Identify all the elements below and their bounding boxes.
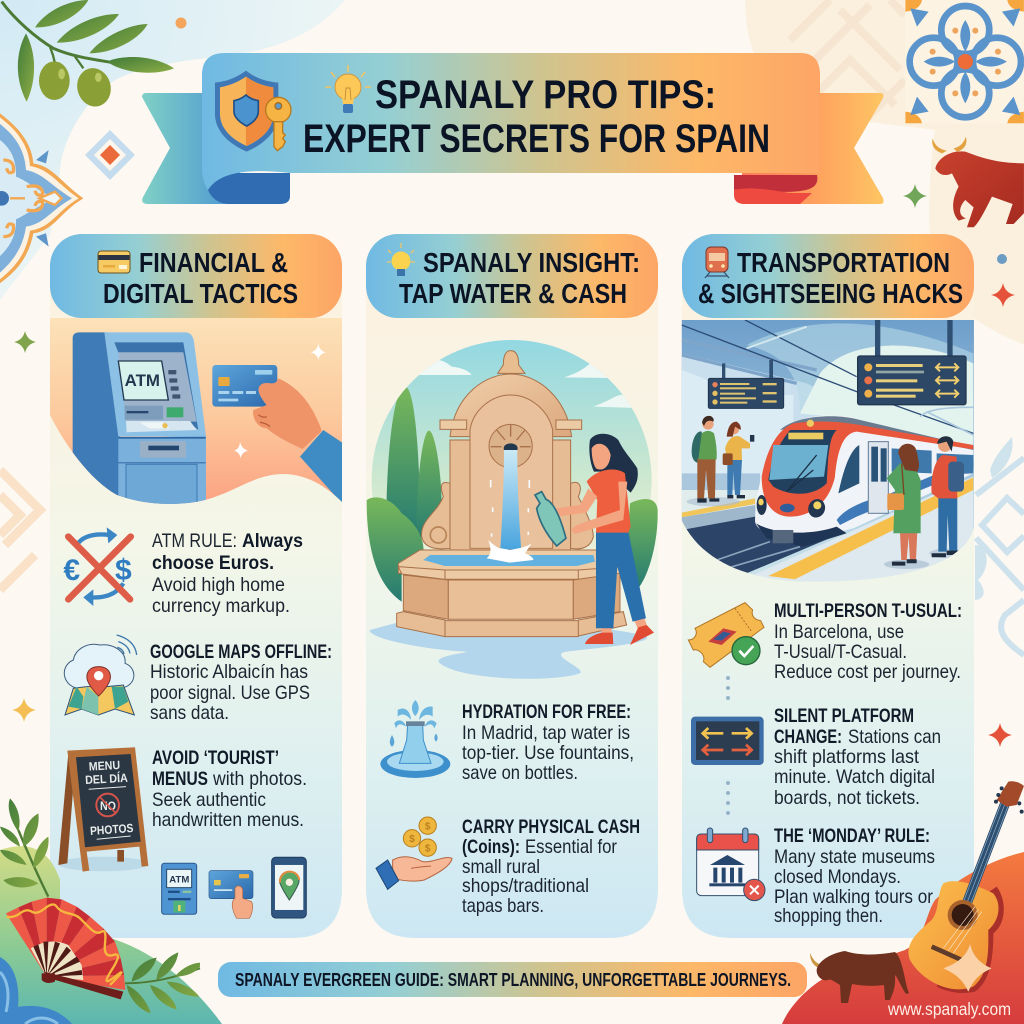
text: avoid tourist menus: with photos. xyxy=(212,768,307,790)
illustration: ATM and card xyxy=(50,318,342,504)
panel 3 background xyxy=(682,270,974,938)
decoration: spanish tile xyxy=(905,0,1024,123)
ribbon left tail xyxy=(142,93,240,204)
footer banner xyxy=(218,962,807,997)
header: transportation and sightseeing xyxy=(682,234,974,318)
people left xyxy=(687,497,740,506)
decoration: guitar xyxy=(908,781,1024,993)
text: the monday rule: closed Mondays. xyxy=(774,866,901,888)
icon: hand with coins: $ xyxy=(425,843,431,854)
text: silent platform change: SILENT PLATFORM xyxy=(774,706,914,727)
text: silent platform change: Stations can xyxy=(848,726,941,748)
icon: water fountain xyxy=(380,700,450,778)
icon: hand with coins: $ xyxy=(425,821,431,832)
title ribbon xyxy=(142,53,884,204)
ribbon main xyxy=(202,53,820,190)
text: carry physical cash: (Coins): xyxy=(462,837,520,858)
text: hydration for free: HYDRATION FOR FREE: xyxy=(462,702,631,723)
icon: mini phone xyxy=(272,857,306,918)
icon: metro ticket with check xyxy=(688,603,764,667)
background: blue top-left blob xyxy=(0,0,345,300)
decoration: fan xyxy=(6,898,125,999)
decoration: bottom left green blob xyxy=(0,846,222,1024)
title text: EXPERT SECRETS FOR SPAIN xyxy=(303,117,770,161)
text: ATM rule: Avoid high home xyxy=(152,574,285,596)
boards xyxy=(722,320,953,378)
basin xyxy=(370,622,647,679)
text: silent platform change: boards, not tickets. xyxy=(774,787,920,809)
text: ATM rule: Always xyxy=(242,531,303,552)
decoration: small bull xyxy=(810,951,909,1003)
text: hydration for free: In Madrid, tap water is xyxy=(462,722,630,744)
panel: transportation and sightseeing xyxy=(680,270,980,938)
icon: train xyxy=(705,247,729,278)
platform right xyxy=(750,477,973,583)
track xyxy=(682,517,833,573)
panel: spanaly insight xyxy=(360,270,660,938)
decoration: pale blue ornament right xyxy=(976,458,1024,655)
fountain back xyxy=(498,351,525,373)
sparkles and dots xyxy=(12,184,1015,747)
decoration: small diamond xyxy=(85,130,135,180)
icon: mini ATM: ATM xyxy=(169,874,189,884)
text: silent platform change: minute. Watch digital xyxy=(774,766,935,788)
train xyxy=(755,415,973,538)
icon: menu board: NO xyxy=(100,799,116,813)
decoration: bottom right red blob xyxy=(782,852,1024,1024)
panel 2 background xyxy=(366,270,658,938)
woman xyxy=(589,434,638,493)
header: spanaly insight: SPANALY INSIGHT: xyxy=(423,247,640,278)
text: avoid tourist menus: AVOID ‘TOURIST’ xyxy=(152,748,279,769)
text: carry physical cash: small rural xyxy=(462,856,540,878)
icon: menu board: PHOTOS xyxy=(90,821,134,838)
decoration: olive branch xyxy=(2,0,174,110)
text: avoid tourist menus: handwritten menus. xyxy=(152,809,304,831)
decoration: pale orange ornament left xyxy=(0,470,40,590)
header: transportation and sightseeing: & SIGHTSEEING HACKS xyxy=(698,278,963,309)
header: financial and digital tactics: DIGITAL TACTICS xyxy=(103,278,298,309)
decoration: bull top right xyxy=(932,137,1024,227)
website url: www.spanaly.com xyxy=(887,999,1011,1019)
icon: currency exchange crossed: $ xyxy=(115,554,132,587)
icon: platform board xyxy=(691,717,764,765)
text: carry physical cash: shops/traditional xyxy=(462,875,589,897)
platform left xyxy=(682,473,760,490)
icon: hand with coins: $ xyxy=(409,834,415,845)
text: the monday rule: Many state museums xyxy=(774,846,935,868)
icon: currency exchange crossed: € xyxy=(63,554,80,587)
text: google maps offline: Historic Albaicín has xyxy=(150,661,308,683)
icon: bulb xyxy=(387,243,415,276)
icon: currency exchange crossed xyxy=(63,527,132,606)
ribbon curl left xyxy=(205,173,290,204)
text: hydration for free: save on bottles. xyxy=(462,762,578,784)
header: spanaly insight: TAP WATER & CASH xyxy=(399,278,627,309)
text: multi-person t-usual: T-Usual/T-Casual. xyxy=(774,641,907,663)
text: avoid tourist menus: MENUS xyxy=(152,769,208,790)
icon: title bulb xyxy=(325,65,371,113)
icon: menu board: MENU xyxy=(88,758,120,774)
illustration: ATM and card: ATM xyxy=(125,371,160,390)
decoration: blue waves xyxy=(0,957,72,1024)
text: the monday rule: shopping then. xyxy=(774,905,883,927)
panel 1 background xyxy=(50,270,342,938)
text: the monday rule: Plan walking tours or xyxy=(774,886,933,908)
ribbon curl right xyxy=(734,175,817,192)
water xyxy=(500,450,522,557)
icon: menu board xyxy=(58,747,148,872)
text: the monday rule: THE ‘MONDAY’ RULE: xyxy=(774,826,930,847)
text: silent platform change: CHANGE: xyxy=(774,727,842,748)
header: financial and digital tactics xyxy=(50,234,342,318)
text: google maps offline: GOOGLE MAPS OFFLINE: xyxy=(150,642,332,663)
text: carry physical cash: Essential for xyxy=(525,836,617,858)
illustration: fountain and woman xyxy=(360,340,660,679)
header: transportation and sightseeing: TRANSPORTATION xyxy=(737,247,950,278)
text: hydration for free: top-tier. Use fountains, xyxy=(462,742,634,764)
connector dots xyxy=(726,676,730,815)
title text: SPANALY PRO TIPS: xyxy=(375,73,716,117)
decoration: pale blue leaf right xyxy=(975,437,1013,600)
text: ATM rule: currency markup. xyxy=(152,595,290,617)
decoration: leaves near fan xyxy=(0,798,200,1013)
text: carry physical cash: tapas bars. xyxy=(462,895,544,917)
people right xyxy=(884,560,929,569)
icon: mini ATM xyxy=(162,863,197,914)
footer banner: SPANALY EVERGREEN GUIDE: SMART PLANNING, UNFORGETTABLE JOURNEYS. xyxy=(235,969,791,990)
icon: cloud and map pin xyxy=(64,635,137,715)
panel: financial and digital tactics xyxy=(50,270,343,938)
icon: calendar museum closed xyxy=(697,828,765,901)
text: avoid tourist menus: Seek authentic xyxy=(152,789,266,811)
text: multi-person t-usual: In Barcelona, use xyxy=(774,621,904,643)
text: multi-person t-usual: Reduce cost per journey. xyxy=(774,661,961,683)
text: google maps offline: sans data. xyxy=(150,702,229,724)
icon: shield and key xyxy=(215,71,291,152)
text: ATM rule: ATM RULE: xyxy=(152,530,237,552)
text: google maps offline: poor signal. Use GPS xyxy=(150,682,310,704)
icon: menu board: DEL DÍA xyxy=(85,770,128,787)
header: financial and digital tactics: FINANCIAL & xyxy=(139,247,288,278)
icon: hand with coins xyxy=(376,817,452,889)
text: ATM rule: choose Euros. xyxy=(152,553,274,574)
background: cream top-right blob xyxy=(745,0,1024,345)
illustration: train station xyxy=(680,320,980,587)
header: spanaly insight xyxy=(366,234,658,318)
text: silent platform change: shift platforms last xyxy=(774,746,920,768)
decoration: left ornament xyxy=(0,113,83,283)
icon: mini card and hand xyxy=(209,871,253,918)
icon: credit card xyxy=(98,251,130,273)
decoration: pale lattice xyxy=(790,0,905,125)
text: carry physical cash: CARRY PHYSICAL CASH xyxy=(462,817,640,838)
ribbon right tail xyxy=(742,93,884,204)
text: multi-person t-usual: MULTI-PERSON T-USUAL: xyxy=(774,601,962,622)
decoration: orange dot xyxy=(176,18,186,28)
